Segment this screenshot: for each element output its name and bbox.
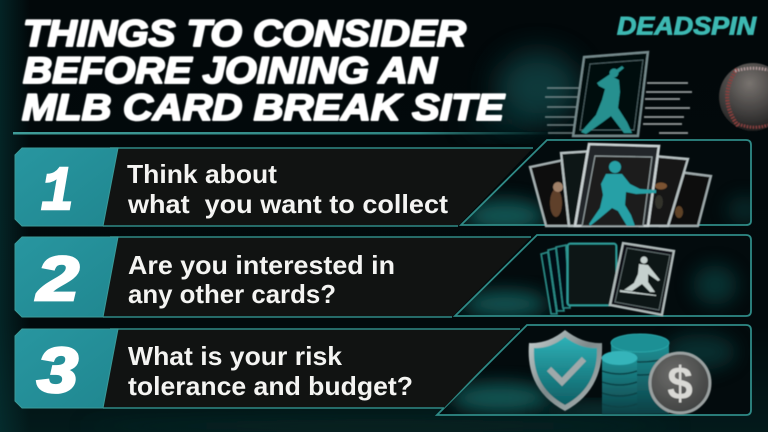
dark text panel 3 (103, 329, 520, 408)
right panel 2 (455, 235, 751, 317)
number tab 1 (15, 148, 118, 226)
fanned card backs (541, 245, 570, 314)
row 1 panel: what you want to collect (127, 189, 448, 219)
title: MLB CARD BREAK SITE (22, 87, 505, 128)
text 1: Think about (127, 159, 277, 189)
row 1 panel (15, 140, 763, 232)
dark text panel 1 (103, 148, 533, 226)
number 1: 1 (41, 157, 74, 228)
front coin stack (602, 351, 638, 414)
row 3 panel: tolerance and budget? (128, 371, 413, 401)
slab (573, 52, 648, 136)
batter silhouette (589, 161, 656, 226)
far left card (530, 160, 578, 226)
title: THINGS TO CONSIDER (23, 13, 466, 54)
dark text panel 2 (103, 237, 531, 317)
illustration: shield, coins and dollar coin (529, 330, 710, 414)
dollar coin: $ (667, 357, 693, 409)
shield (529, 330, 602, 411)
right panel 1 (461, 140, 763, 232)
number tab 3 (15, 329, 118, 408)
inner left card (561, 151, 592, 226)
inner right card (640, 156, 688, 226)
number 2: 2 (36, 245, 79, 314)
row 2 panel: any other cards? (128, 279, 336, 309)
title (22, 13, 505, 128)
far right card (660, 171, 711, 226)
illustration: stack of cards and batter card (541, 243, 674, 315)
baseball (719, 63, 768, 131)
title: BEFORE JOINING AN (23, 50, 438, 91)
illustration: fan of graded cards (530, 144, 711, 226)
illustration: slabbed batter card with stacks and baseball (545, 52, 768, 136)
row 3 panel (15, 325, 751, 417)
row 2 panel (15, 235, 751, 317)
text 3: What is your risk (128, 341, 343, 371)
batter silhouette (581, 66, 632, 134)
card stack right (643, 83, 692, 133)
back coin stack (611, 334, 669, 414)
number 3: 3 (37, 336, 78, 406)
card stack left (545, 88, 580, 133)
number tab 2 (15, 237, 118, 317)
text 2: Are you interested in (128, 250, 395, 280)
right panel 3 (437, 325, 751, 417)
batter card (610, 243, 674, 315)
center card (575, 144, 659, 226)
front card back (568, 244, 616, 306)
logo: Deadspin: DEADSPIN (617, 12, 757, 40)
dollar coin (650, 353, 710, 413)
